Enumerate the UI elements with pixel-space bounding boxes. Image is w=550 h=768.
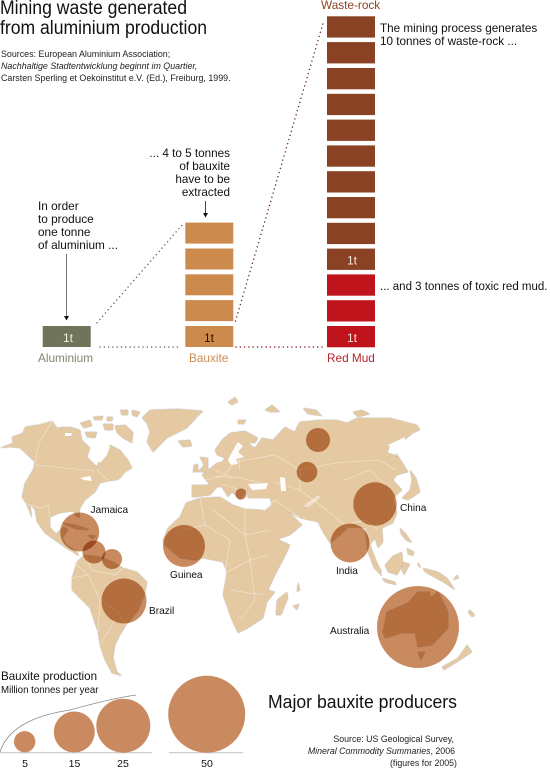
circle: Guinea [163, 525, 205, 567]
circle: Jamaica [60, 512, 99, 552]
legend heading [1, 670, 99, 696]
title: from aluminium production [0, 18, 207, 39]
subtitle: Major bauxite producers [268, 692, 457, 712]
legend heading: Million tonnes per year [1, 685, 99, 696]
legend: proportional circles [0, 676, 245, 768]
bauxite label: Bauxite [189, 351, 229, 365]
country labels: Jamaica [90, 505, 128, 516]
source text block [308, 734, 457, 768]
country labels: China [400, 503, 427, 514]
waste-rock stack: 1t [347, 254, 358, 268]
source text block: Source: US Geological Survey, [333, 734, 454, 744]
circle: Brazil [102, 578, 146, 624]
source text block: (figures for 2005) [390, 758, 457, 768]
country labels: Brazil [149, 606, 174, 617]
sources text block: Carsten Sperling et Oekoinstitut e.V. (Ed.), Freiburg, 1999. [1, 73, 231, 83]
pale desert patch [303, 495, 321, 507]
country borders [25, 421, 395, 645]
waste-rock caption: 10 tonnes of waste-rock ... [380, 35, 517, 48]
title [0, 0, 207, 39]
waste-rock stack [327, 16, 375, 270]
sources text block [1, 49, 231, 83]
aluminium caption: In order [38, 199, 79, 213]
aluminium caption: of aluminium ... [38, 238, 118, 252]
bauxite caption: extracted [182, 186, 230, 199]
circle: China [353, 482, 397, 526]
bauxite caption: ... 4 to 5 tonnes [149, 147, 230, 160]
arrow: to bauxite [203, 201, 208, 218]
red mud label: Red Mud [327, 351, 375, 365]
waste-rock caption [380, 22, 537, 48]
source text block: Mineral Commodity Summaries, 2006 [308, 746, 455, 756]
circle: Venezuela [82, 540, 106, 564]
world map [0, 397, 475, 676]
circle: Greece [236, 488, 246, 500]
red mud stack: 1t [347, 331, 358, 345]
country labels: Australia [330, 626, 370, 637]
bauxite caption: of bauxite [179, 160, 230, 173]
aluminium caption: to produce [38, 212, 94, 226]
dotted connectors [97, 20, 324, 347]
waste-rock caption: The mining process generates [380, 22, 537, 35]
circle: Russia [306, 428, 330, 452]
land masses [0, 397, 475, 676]
red mud stack [327, 274, 375, 347]
circle: India [330, 524, 370, 562]
sources text block: Nachhaltige Stadtentwicklung beginnt im Quartier, [1, 61, 197, 71]
aluminium label: Aluminium [38, 351, 93, 365]
country labels: India [336, 566, 358, 577]
aluminium bar [43, 326, 91, 347]
bauxite stack: 1t [204, 331, 215, 345]
red mud caption: ... and 3 tonnes of toxic red mud. [380, 281, 548, 293]
bauxite caption [149, 147, 230, 199]
aluminium caption [38, 199, 118, 252]
bauxite caption: have to be [175, 173, 230, 186]
country labels [90, 503, 427, 637]
circle: Suriname [102, 549, 122, 569]
bauxite stack [185, 223, 233, 347]
arrow: to aluminium [64, 254, 69, 320]
inland seas and lakes [65, 433, 405, 491]
circle: Australia [377, 586, 459, 668]
sources text block: Sources: European Aluminium Association; [1, 49, 170, 59]
legend heading: Bauxite production [1, 670, 97, 683]
aluminium bar: 1t [63, 331, 74, 345]
circle: Kazakhstan [297, 462, 317, 482]
aluminium caption: one tonne [38, 225, 91, 239]
country labels: Guinea [170, 570, 203, 581]
production circles [60, 428, 459, 668]
